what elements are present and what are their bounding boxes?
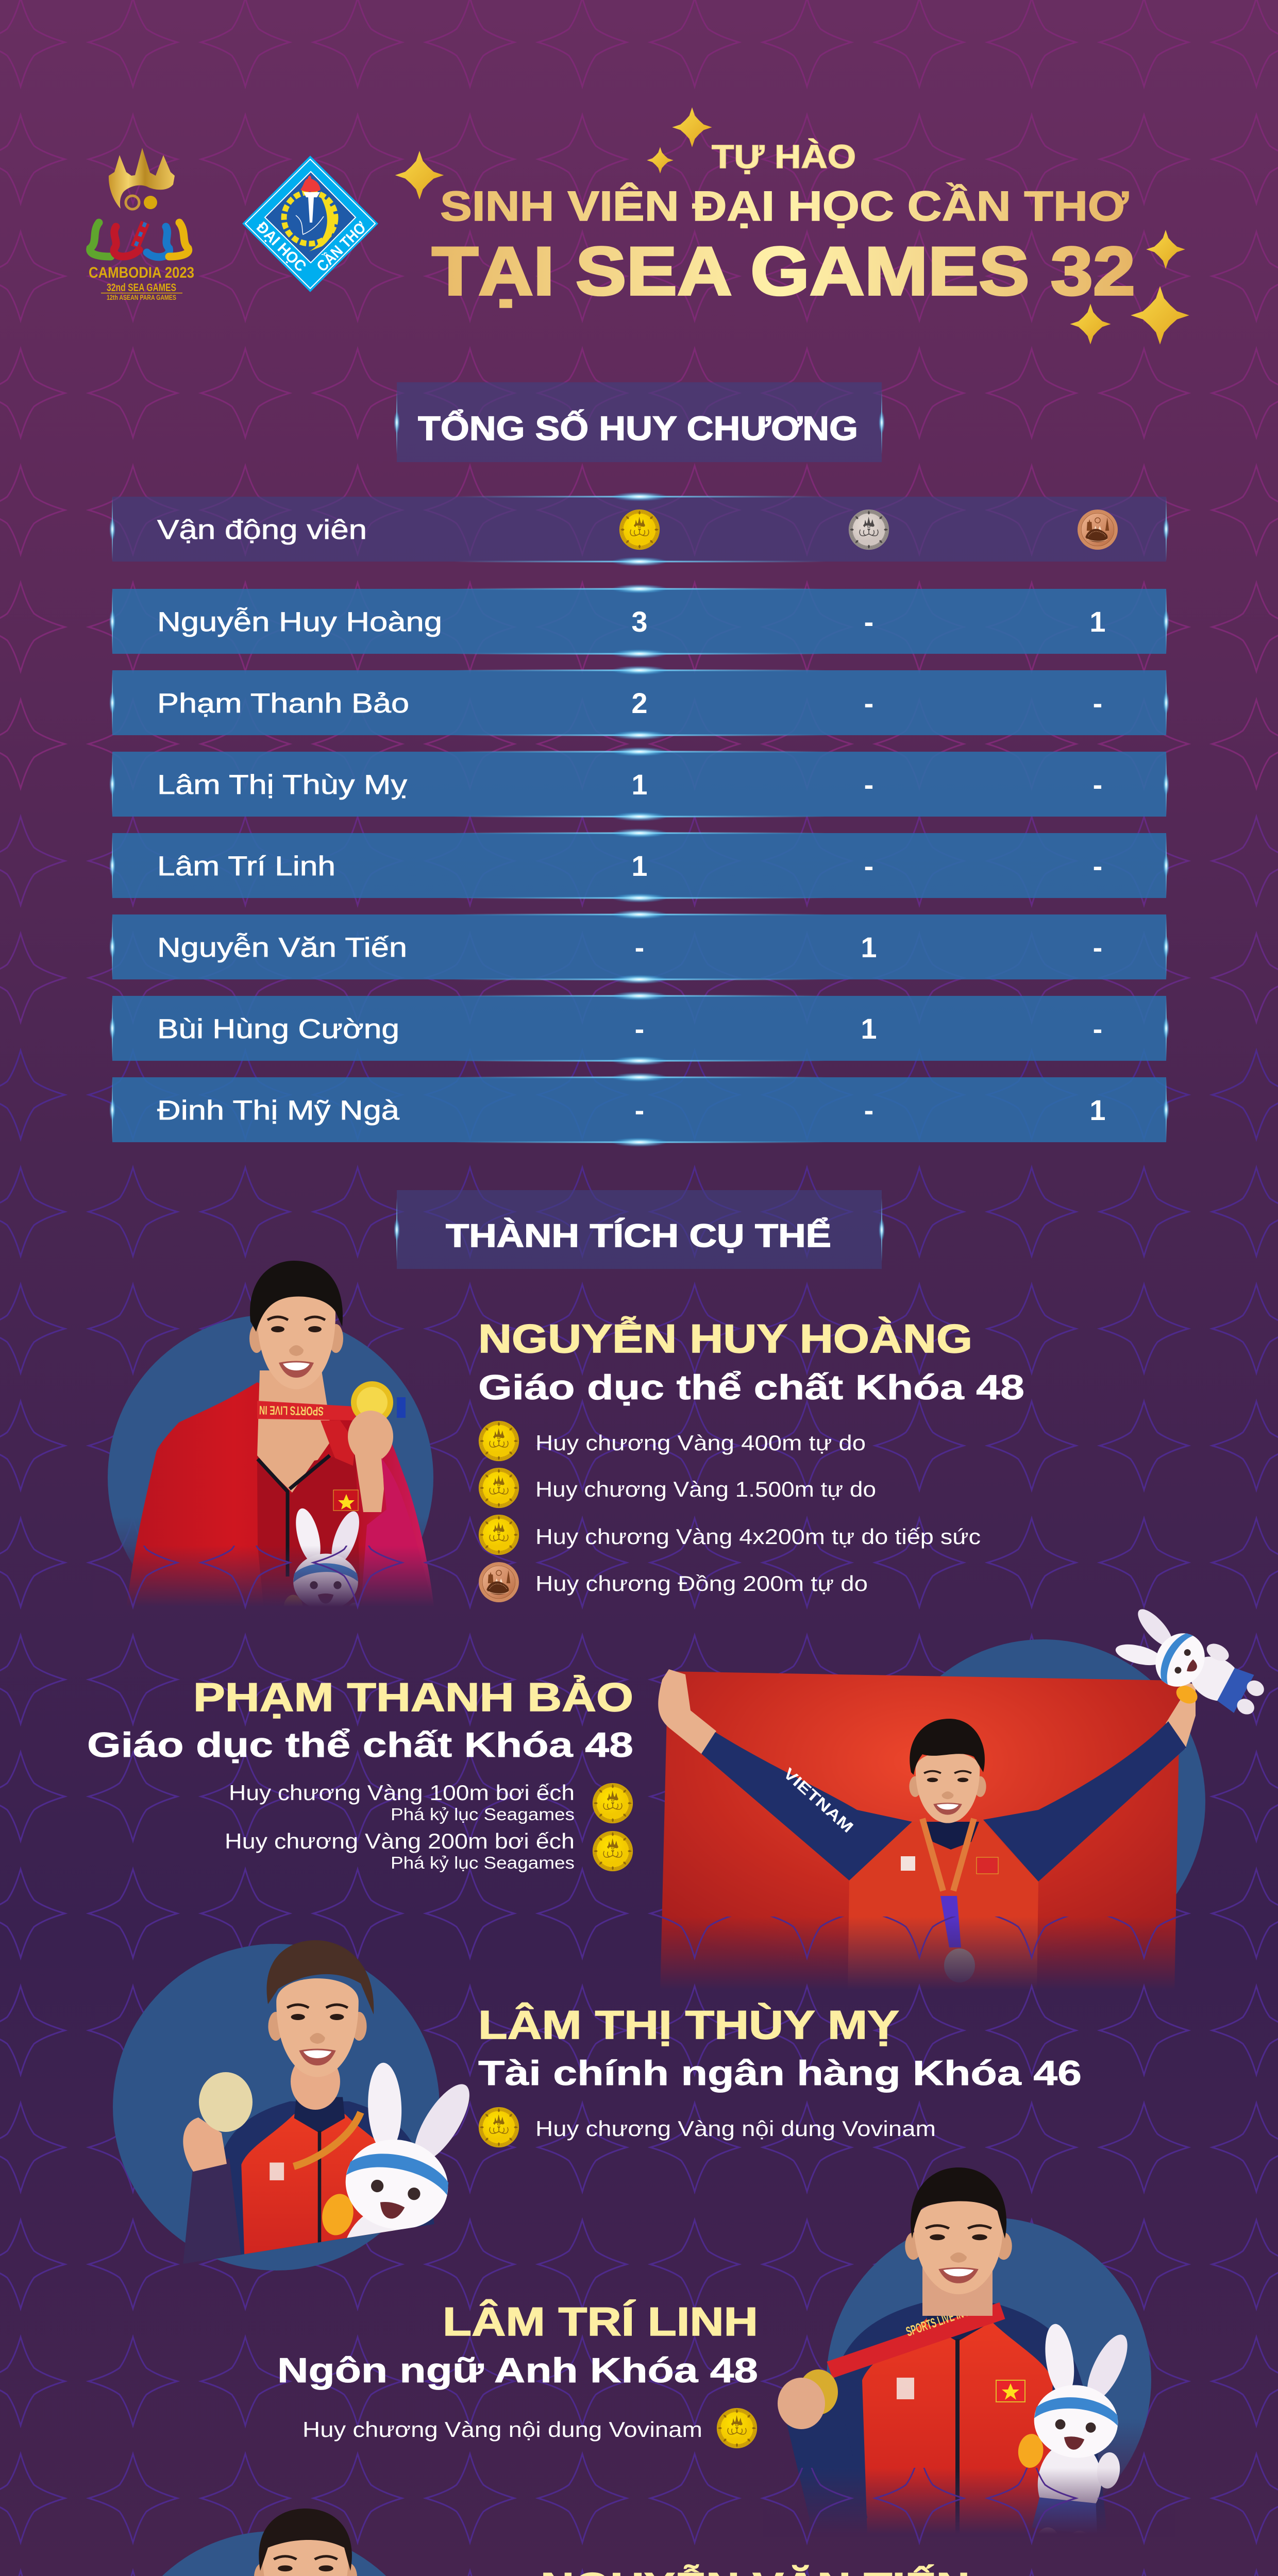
block: Phạm Thanh Bảo: Phá kỷ lục Seagames [391, 1805, 575, 1824]
row: Lâm Thị Thùy My: - [1093, 768, 1102, 801]
row: Nguyễn Văn Tiến: 1 [861, 931, 877, 963]
photo: Phạm Thanh Bảo [649, 1601, 1274, 1994]
row: Nguyễn Huy Hoàng: - [864, 605, 873, 638]
block: Lâm Trí Linh: LÂM TRÍ LINH [443, 2299, 758, 2344]
row: Bùi Hùng Cường: - [635, 1012, 644, 1045]
row: Nguyễn Văn Tiến [109, 910, 1169, 984]
title: SINH VIÊN ĐẠI HỌC CẦN THƠ [440, 182, 1129, 230]
block: Lâm Trí Linh: Ngôn ngữ Anh Khóa 48 [277, 2351, 758, 2390]
block: Nguyễn Huy Hoàng: Huy chương Đồng 200m tự do [535, 1571, 868, 1596]
block: Lâm Trí Linh [277, 2299, 758, 2448]
row: Phạm Thanh Bảo: Phạm Thanh Bảo [157, 688, 409, 719]
row: Đinh Thị Mỹ Ngà: - [864, 1094, 873, 1126]
photo: Nguyễn Văn Tiến [162, 2509, 386, 2576]
row: Bùi Hùng Cường: Bùi Hùng Cường [157, 1014, 399, 1044]
title [432, 138, 1135, 310]
block: Phạm Thanh Bảo: Phá kỷ lục Seagames [391, 1853, 575, 1872]
block: Nguyễn Huy Hoàng: Huy chương Vàng 4x200m tự do tiếp sức [535, 1524, 981, 1549]
row: Phạm Thanh Bảo: - [864, 687, 873, 719]
title: TẠI SEA GAMES 32 [432, 233, 1135, 310]
row: Đinh Thị Mỹ Ngà: 1 [1089, 1094, 1106, 1126]
block: Nguyễn Huy Hoàng [478, 1316, 1024, 1602]
block: Nguyễn Huy Hoàng: Huy chương Vàng 400m tự do [535, 1431, 866, 1455]
title: TỰ HÀO [712, 138, 856, 175]
row: Lâm Trí Linh: - [1093, 850, 1102, 882]
row: Lâm Trí Linh: - [864, 850, 873, 882]
photo: Lâm Trí Linh: SPORTS LIVE IN PEACE [904, 2296, 992, 2340]
block: Phạm Thanh Bảo: Giáo dục thể chất Khóa 48 [87, 1725, 633, 1765]
block: Lâm Trí Linh: Huy chương Vàng nội dung Vovinam [302, 2417, 702, 2442]
photo: Lâm Thị Thùy Mỵ [113, 1940, 469, 2270]
row: Bùi Hùng Cường: - [1093, 1012, 1102, 1045]
row: Bùi Hùng Cường [109, 991, 1169, 1065]
row: Bùi Hùng Cường: 1 [861, 1012, 877, 1045]
row: Phạm Thanh Bảo [109, 666, 1169, 740]
row: Nguyễn Huy Hoàng: 1 [1089, 605, 1106, 638]
table header row: Vận động viên [157, 515, 367, 545]
row: Nguyễn Huy Hoàng [109, 584, 1169, 658]
row: Nguyễn Văn Tiến: - [1093, 931, 1102, 963]
block: Lâm Thị Thùy Mỵ: Huy chương Vàng nội dung Vovinam [535, 2116, 936, 2141]
block: Phạm Thanh Bảo: Huy chương Vàng 200m bơi ếch [225, 1829, 575, 1853]
heading: tổng số huy chương: TỔNG SỐ HUY CHƯƠNG [418, 409, 858, 447]
row: Lâm Trí Linh: Lâm Trí Linh [157, 851, 335, 882]
photo: Lâm Trí Linh [763, 2167, 1175, 2562]
photo: Nguyễn Huy Hoàng [93, 1261, 460, 1604]
row: Đinh Thị Mỹ Ngà: Đinh Thị Mỹ Ngà [157, 1095, 400, 1126]
logo: Cambodia 2023 SEA Games: CAMBODIA 2023 [89, 264, 194, 281]
logo: Đại học Cần Thơ [242, 156, 378, 292]
block: Lâm Thị Thùy Mỵ: Tài chính ngân hàng Khóa 46 [478, 2054, 1082, 2093]
heading: thành tích cụ thể: THÀNH TÍCH CỤ THỂ [446, 1217, 831, 1254]
row: Nguyễn Văn Tiến: Nguyễn Văn Tiến [157, 933, 407, 963]
decorative gold sparkles [395, 107, 1189, 345]
photo: Nguyễn Huy Hoàng: SPORTS LIVE IN [259, 1403, 324, 1418]
heading: tổng số huy chương [394, 382, 885, 462]
row: Nguyễn Văn Tiến: - [635, 931, 644, 963]
logo: Cambodia 2023 SEA Games [89, 148, 194, 301]
block: Nguyễn Huy Hoàng: Huy chương Vàng 1.500m tự do [535, 1477, 876, 1501]
row: Đinh Thị Mỹ Ngà: - [635, 1094, 644, 1126]
row: Lâm Trí Linh [109, 828, 1169, 903]
logo: Đại học Cần Thơ: CẦN THƠ [313, 218, 370, 275]
block: Nguyễn Huy Hoàng: NGUYỄN HUY HOÀNG [478, 1316, 972, 1361]
block: Nguyễn Huy Hoàng: Giáo dục thể chất Khóa 48 [478, 1368, 1024, 1407]
row: Lâm Trí Linh: 1 [631, 850, 648, 882]
block: Lâm Thị Thùy Mỵ [478, 2002, 1082, 2147]
logo: Đại học Cần Thơ: ĐẠI HỌC [253, 218, 310, 275]
row: Lâm Thị Thùy My: 1 [631, 768, 648, 801]
block: Phạm Thanh Bảo: Huy chương Vàng 100m bơi ếch [229, 1781, 575, 1805]
row: Nguyễn Huy Hoàng: 3 [631, 605, 648, 638]
row: Lâm Thị Thùy My: Lâm Thị Thùy Mỵ [157, 770, 408, 800]
heading: thành tích cụ thể [394, 1190, 885, 1269]
row: Nguyễn Huy Hoàng: Nguyễn Huy Hoàng [157, 607, 442, 637]
row: Lâm Thị Thùy My [109, 747, 1169, 821]
logo: Cambodia 2023 SEA Games: 12th ASEAN PARA GAMES [107, 293, 176, 301]
table header row [109, 492, 1169, 566]
logo: Cambodia 2023 SEA Games: 32nd SEA GAMES [107, 282, 176, 294]
block: Lâm Thị Thùy Mỵ: LÂM THỊ THÙY MỴ [478, 2002, 899, 2047]
table: total medals [109, 492, 1169, 1147]
row: Phạm Thanh Bảo: - [1093, 687, 1102, 719]
block: Phạm Thanh Bảo: PHẠM THANH BẢO [193, 1674, 633, 1720]
block: Phạm Thanh Bảo [87, 1674, 633, 1872]
row: Phạm Thanh Bảo: 2 [631, 687, 648, 719]
row: Đinh Thị Mỹ Ngà [109, 1073, 1169, 1147]
photo: Phạm Thanh Bảo: VIETNAM [780, 1765, 856, 1836]
row: Lâm Thị Thùy My: - [864, 768, 873, 801]
